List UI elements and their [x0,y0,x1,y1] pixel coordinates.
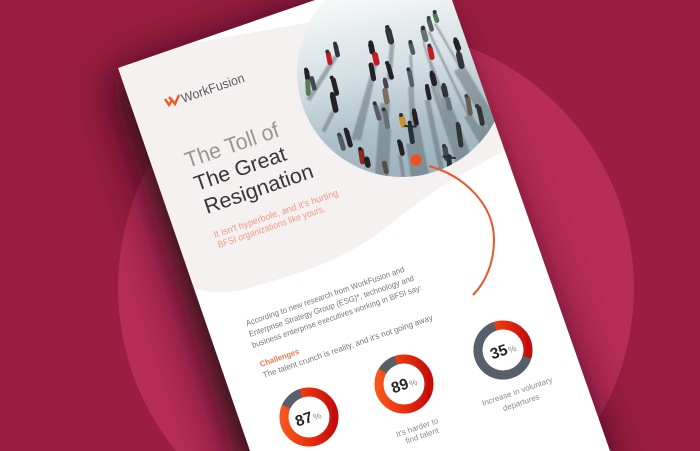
caption line 1: Increase in voluntary [481,375,554,408]
subtitle line 1: It isn't hyperbole, and it's hurting [212,188,340,241]
intro line 1: According to new research from WorkFusion and [245,265,406,328]
title [184,121,314,214]
orange connector dot [410,154,422,166]
caption: harder to find talent [396,419,440,444]
intro line 3: business enterprise executives working in BFSI say: [251,283,423,350]
orange connector curve [429,166,494,295]
caption: increase in voluntary departures [482,378,552,411]
logo wordmark: WorkFusion [179,70,246,106]
donut chart: 87% [280,388,338,446]
donut chart: 35% [472,319,534,381]
challenges heading: Challenges [259,347,301,369]
value 89: % [408,377,419,389]
challenges subheading: The talent crunch is reality, and it's not going away [262,313,435,380]
title line 2: The Great [191,143,290,196]
value 87: 87 [293,409,315,431]
infographic scene [82,0,639,451]
logo mark [165,95,179,105]
caption line 2: departures [502,392,541,413]
page base [185,0,610,451]
page shadow [106,0,618,451]
background circle [118,30,634,451]
value 35: 35 [488,342,510,363]
donut chart: 89% [374,354,434,414]
intro paragraph [245,265,423,350]
photo backdrop [297,0,494,177]
people figures [304,10,484,172]
subtitle line 2: BFSI organizations like yours. [216,204,327,251]
long shadows [308,23,502,177]
photo: crowd of people [297,0,494,177]
subtitle [214,190,338,248]
title line 1: The Toll of [181,117,283,173]
caption line 2: find talent [404,425,441,446]
logo: WorkFusion [164,76,245,108]
title line 3: Resignation [201,160,316,219]
intro line 2: Enterprise Strategy Group (ESG)*, technology and [248,274,416,339]
value 87: % [312,410,323,422]
page: document sheet [100,0,620,451]
caption line 1: It's harder to [395,416,440,439]
value 89: 89 [389,376,411,397]
value 35: % [507,343,518,355]
header wave panel [118,22,504,292]
